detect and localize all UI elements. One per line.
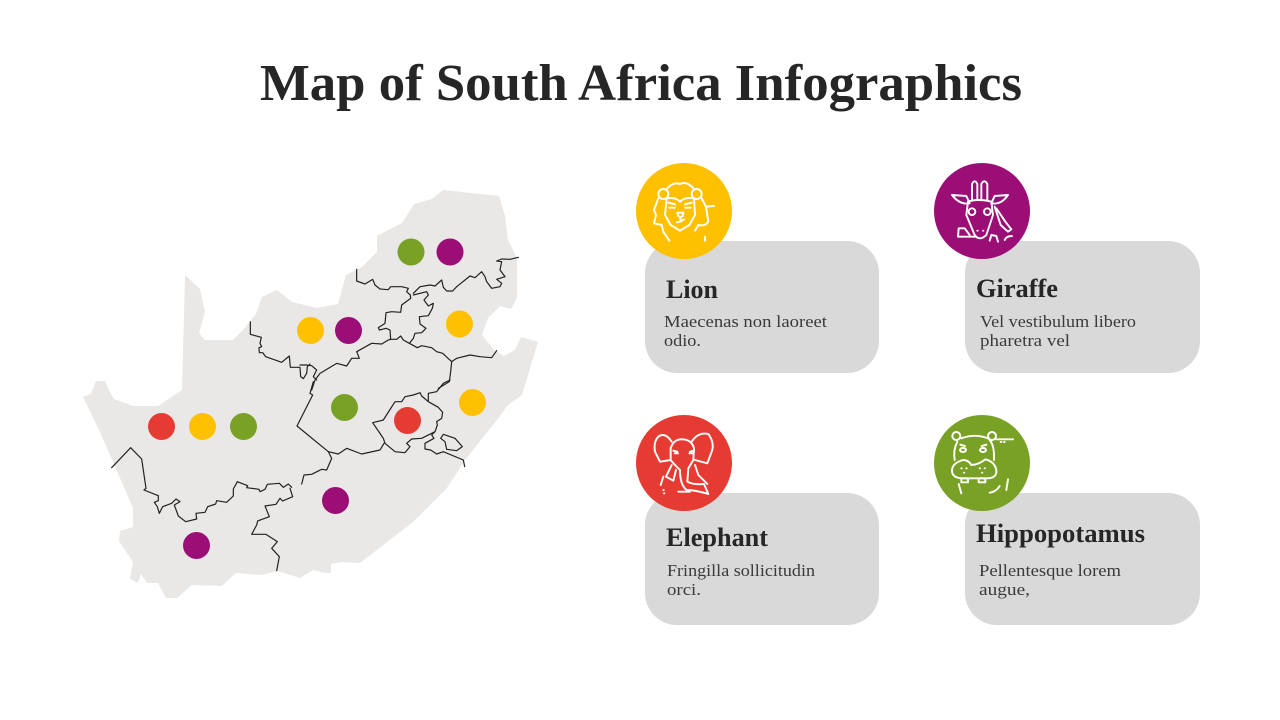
icon: giraffe <box>952 181 1012 242</box>
icon: lion <box>654 183 714 241</box>
province borders south <box>112 448 293 571</box>
hippopotamus description: Pellentesque lorem <box>979 561 1121 580</box>
panel: giraffe <box>934 163 1200 373</box>
hippopotamus card <box>965 493 1200 625</box>
icon: hippopotamus <box>952 432 1013 493</box>
giraffe description: Vel vestibulum libero <box>980 312 1136 331</box>
lion heading: Lion <box>666 275 719 304</box>
map of South Africa <box>83 190 538 598</box>
map landmass <box>83 190 538 598</box>
province borders east and Lesotho <box>297 380 465 484</box>
title: Map of South Africa Infographics <box>260 55 1022 112</box>
giraffe description: pharetra vel <box>980 331 1070 350</box>
hippopotamus badge <box>934 415 1030 511</box>
panel: hippopotamus <box>934 415 1200 625</box>
icon: elephant <box>655 434 713 494</box>
hippopotamus description: augue, <box>979 580 1030 599</box>
giraffe card <box>965 241 1200 373</box>
province borders north <box>300 257 518 390</box>
lion badge <box>636 163 732 259</box>
panel: lion <box>636 163 879 373</box>
elephant description: orci. <box>667 580 701 599</box>
lion card <box>645 241 879 373</box>
elephant heading: Elephant <box>666 523 768 552</box>
lion description: Maecenas non laoreet <box>664 312 827 331</box>
lion description: odio. <box>664 331 701 350</box>
elephant card <box>645 493 879 625</box>
map marker dots <box>148 238 486 559</box>
elephant badge <box>636 415 732 511</box>
giraffe heading: Giraffe <box>976 274 1058 303</box>
hippopotamus heading: Hippopotamus <box>976 519 1145 548</box>
elephant description: Fringilla sollicitudin <box>667 561 816 580</box>
province borders west <box>250 322 310 379</box>
panel: elephant <box>636 415 879 625</box>
giraffe badge <box>934 163 1030 259</box>
